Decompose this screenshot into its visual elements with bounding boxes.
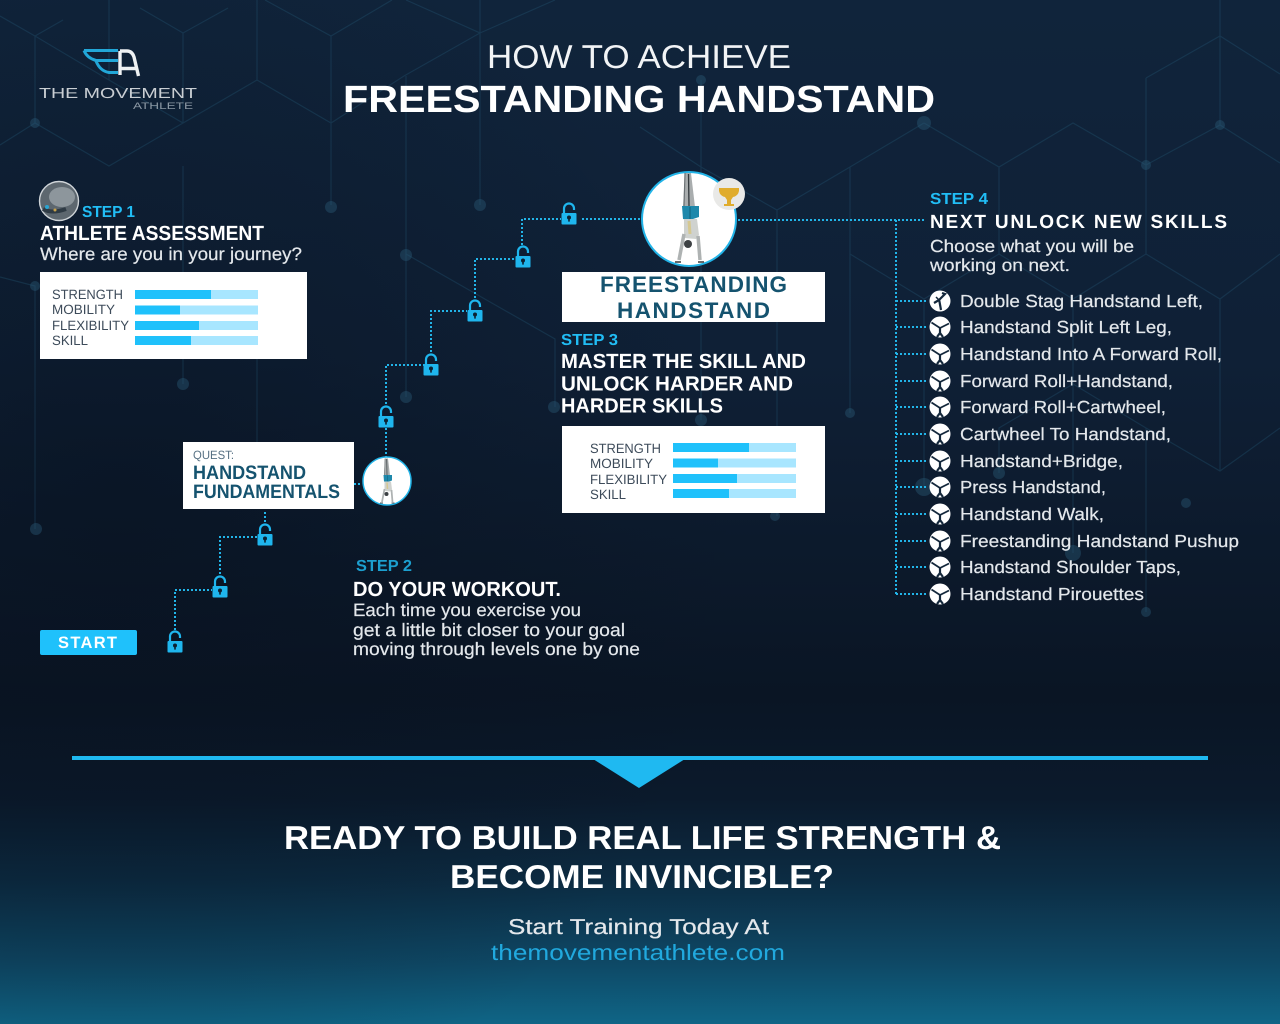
skill names: Forward Roll+Cartwheel, <box>960 397 1166 417</box>
start button: START <box>58 634 117 652</box>
icon: athlete avatar <box>40 182 78 220</box>
call to action: BECOME INVINCIBLE? <box>450 858 834 895</box>
panel: step 3 stats: STRENGTH <box>590 441 661 456</box>
icon: freestanding handstand athlete circle <box>642 172 736 266</box>
skill names: Handstand Pirouettes <box>960 584 1144 604</box>
step 2 text: DO YOUR WORKOUT. <box>353 578 561 601</box>
panel: step 3 stats: SKILL <box>590 487 626 502</box>
panel: step 1 stats: STRENGTH <box>52 287 123 302</box>
panel: step 1 stats: MOBILITY <box>52 302 115 317</box>
start button <box>40 630 137 655</box>
dotted progress path <box>175 219 926 630</box>
panel: quest handstand fundamentals <box>183 442 354 509</box>
step 4 text <box>929 191 1227 275</box>
panel: freestanding handstand label: FREESTANDING <box>600 272 787 297</box>
panel: step 1 stats: SKILL <box>52 333 88 348</box>
panel: step 3 stats <box>562 426 825 513</box>
panel: freestanding handstand label: HANDSTAND <box>617 298 770 323</box>
skill icons <box>930 290 950 604</box>
step 4 text: NEXT UNLOCK NEW SKILLS <box>930 212 1227 233</box>
skill names: Handstand Into A Forward Roll, <box>960 344 1222 364</box>
panel: step 3 stats: FLEXIBILITY <box>590 472 667 487</box>
panel: quest handstand fundamentals: HANDSTAND <box>193 462 306 484</box>
step 2 text <box>353 558 640 659</box>
skill names: Double Stag Handstand Left, <box>960 291 1203 311</box>
call to action: READY TO BUILD REAL LIFE STRENGTH & <box>284 819 1001 856</box>
panel: step 3 stats: MOBILITY <box>590 456 653 471</box>
call to action <box>284 819 1001 965</box>
step 1 heading: STEP 1 <box>82 204 135 221</box>
logo: The Movement Athlete: ATHLETE <box>133 101 193 112</box>
step 1 heading: ATHLETE ASSESSMENT <box>40 222 264 245</box>
step 2 text: moving through levels one by one <box>353 639 640 659</box>
logo: The Movement Athlete <box>39 50 197 112</box>
skill names: Handstand Walk, <box>960 504 1104 524</box>
skill names: Handstand Shoulder Taps, <box>960 557 1181 577</box>
skill list <box>930 290 1239 604</box>
title: HOW TO ACHIEVE <box>487 38 791 75</box>
panel: step 1 stats <box>40 272 307 359</box>
skill names: Press Handstand, <box>960 477 1106 497</box>
lock icons <box>168 204 576 652</box>
icon: quest athlete circle <box>363 457 411 505</box>
icon: trophy badge <box>713 178 745 210</box>
step 3 text: STEP 3 <box>561 332 618 349</box>
step 1 heading <box>40 182 302 264</box>
logo: The Movement Athlete: THE MOVEMENT <box>39 86 197 102</box>
step 3 text: HARDER SKILLS <box>561 394 723 418</box>
divider with arrow <box>72 756 1208 788</box>
step 4 text: STEP 4 <box>930 191 988 208</box>
title: FREESTANDING HANDSTAND <box>343 79 935 121</box>
skill names: Handstand+Bridge, <box>960 451 1123 471</box>
step 3 text: MASTER THE SKILL AND <box>561 350 806 373</box>
panel: quest handstand fundamentals: FUNDAMENTALS <box>193 481 340 503</box>
skill names <box>960 291 1239 604</box>
call to action: themovementathlete.com <box>491 940 785 965</box>
step 2 text: STEP 2 <box>356 558 412 575</box>
step 1 heading: Where are you in your journey? <box>40 244 302 264</box>
title <box>343 38 935 121</box>
skill names: Forward Roll+Handstand, <box>960 371 1173 391</box>
panel: quest handstand fundamentals: QUEST: <box>193 448 234 462</box>
call to action: Start Training Today At <box>508 915 769 939</box>
icon: winged A <box>84 50 138 76</box>
skill names: Handstand Split Left Leg, <box>960 317 1172 337</box>
panel: step 1 stats: FLEXIBILITY <box>52 318 129 333</box>
step 2 text: get a little bit closer to your goal <box>353 620 625 640</box>
step 3 text <box>561 332 806 418</box>
panel: freestanding handstand label <box>562 272 825 323</box>
skill names: Freestanding Handstand Pushup <box>960 531 1239 551</box>
step 2 text: Each time you exercise you <box>353 600 581 620</box>
step 3 text: UNLOCK HARDER AND <box>561 372 793 396</box>
step 4 text: Choose what you will be <box>930 236 1134 256</box>
step 4 text: working on next. <box>929 255 1070 275</box>
skill names: Cartwheel To Handstand, <box>960 424 1171 444</box>
